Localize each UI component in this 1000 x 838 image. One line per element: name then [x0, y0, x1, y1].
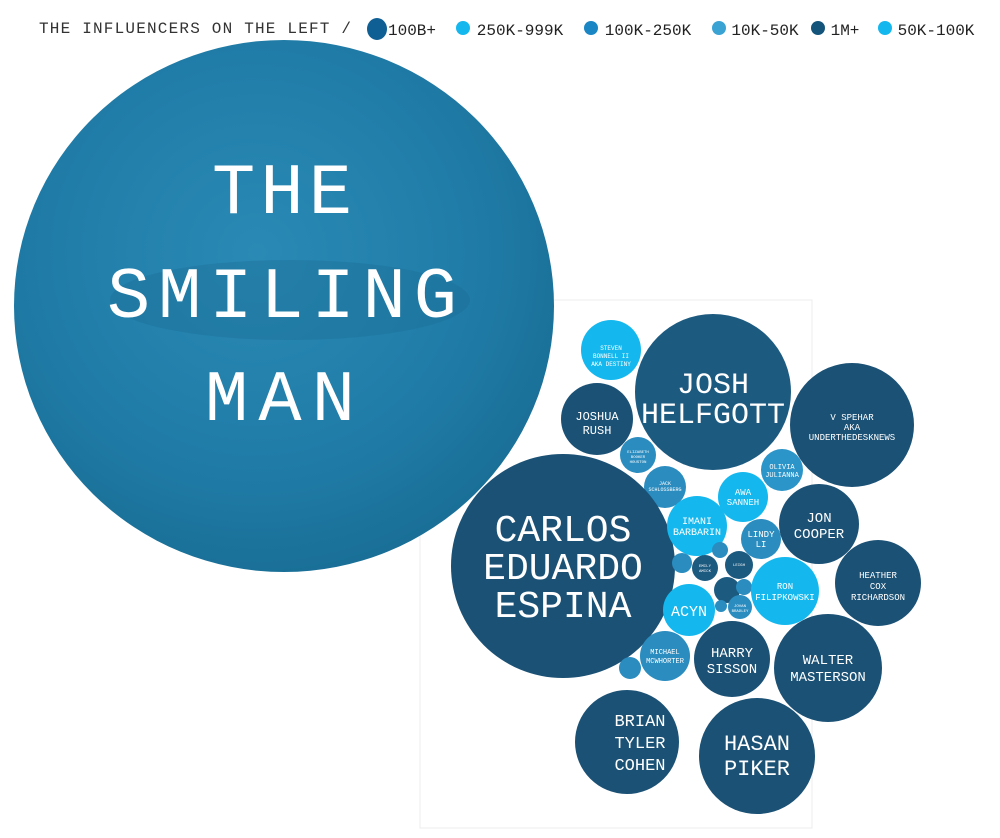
bubble: Elizabeth: ELIZABETH: [627, 451, 649, 455]
bubble: Ron Filipkowski: RON: [777, 582, 793, 592]
big circle: the smiling man: [14, 40, 554, 572]
bubble: Walter Masterson: [774, 614, 882, 722]
bubble: Olivia Julianna: OLIVIA: [769, 464, 795, 472]
bubble: Acyn: ACYN: [671, 604, 707, 621]
bubble: V Spehar: V SPEHAR: [830, 413, 874, 423]
bubble: Jon Cooper: [779, 484, 859, 564]
legend: 250K-999K: [477, 22, 564, 40]
bubble chart: [451, 314, 921, 814]
bubble: Joshua Rush: RUSH: [583, 424, 611, 438]
bubble: Brian Tyler Cohen: BRIAN: [614, 713, 666, 732]
bubble: Joshua Rush: JOSHUA: [575, 410, 619, 424]
bubble: Brian Tyler Cohen: COHEN: [614, 757, 666, 776]
small bubbles: BRADLEY: [732, 610, 749, 614]
bubble: Heather Cox Richardson: RICHARDSON: [851, 593, 905, 603]
bubble: Heather Cox Richardson: [835, 540, 921, 626]
legend: 100B+: [388, 22, 436, 40]
bubble: Ron Filipkowski: [751, 557, 819, 625]
bubble: Hasan Piker: HASAN: [724, 732, 790, 757]
legend: 50K-100K: [898, 22, 975, 40]
small bubbles: [619, 542, 753, 679]
bubble: Awa Sanneh: AWA: [735, 488, 752, 498]
big circle: the smiling man: SMILING: [107, 257, 457, 339]
small bubbles: AMICK: [699, 570, 712, 574]
bubble: Acyn: [663, 584, 715, 636]
legend: 100K-250K: [605, 22, 692, 40]
bubble: V Spehar: AKA: [844, 423, 861, 433]
bubble: Olivia Julianna: JULIANNA: [765, 472, 800, 480]
small bubbles: EMILY: [699, 565, 712, 569]
bubble: Elizabeth: BOOKER: [631, 456, 646, 460]
bubble: Harry Sisson: HARRY: [711, 646, 754, 662]
bubble: V Spehar: UNDERTHEDESKNEWS: [809, 433, 895, 443]
bubble: Elizabeth: [620, 437, 656, 473]
bubble: Imani Barbarin: BARBARIN: [673, 528, 721, 539]
legend: THE INFLUENCERS ON THE LEFT /: [39, 20, 351, 38]
bubble: Heather Cox Richardson: COX: [870, 582, 887, 592]
bubble: Jack Schlossberg: SCHLOSSBERG: [648, 487, 682, 493]
bubble: Awa Sanneh: [718, 472, 768, 522]
bubble: Josh Helfgott: HELFGOTT: [641, 399, 785, 433]
bubble: Michael McWhorter: MICHAEL: [650, 649, 680, 657]
bubble: Harry Sisson: [694, 621, 770, 697]
bubble: Elizabeth: HOUSTON: [630, 461, 647, 465]
bubble: Hasan Piker: [699, 698, 815, 814]
bubble: Heather Cox Richardson: HEATHER: [859, 571, 897, 581]
bubble: Michael McWhorter: MCWHORTER: [646, 658, 685, 666]
bubble: Lindy Li: [741, 519, 781, 559]
bubble: Carlos Eduardo Espina: EDUARDO: [483, 548, 643, 591]
bubble: Lindy Li: LINDY: [747, 530, 775, 540]
legend: [39, 18, 975, 40]
bubble: Jack Schlossberg: JACK: [659, 481, 671, 487]
bubble: Brian Tyler Cohen: [575, 690, 679, 794]
bubble: Joshua Rush: [561, 383, 633, 455]
bubble: Carlos Eduardo Espina: CARLOS: [495, 510, 631, 553]
bubble: Hasan Piker: PIKER: [724, 757, 790, 782]
small bubbles: JOVAN: [734, 605, 747, 609]
bubble: Steven Bonnell: [581, 320, 641, 380]
bubble: Imani Barbarin: IMANI: [682, 517, 712, 528]
bubble: Brian Tyler Cohen: TYLER: [614, 735, 666, 754]
legend: 10K-50K: [731, 22, 799, 40]
bubble: Harry Sisson: SISSON: [707, 662, 757, 678]
bubble: Michael McWhorter: [640, 631, 690, 681]
bubble: Steven Bonnell: AKA DESTINY: [591, 361, 631, 368]
bubble: Walter Masterson: WALTER: [803, 653, 854, 669]
bubble: Olivia Julianna: [761, 449, 803, 491]
bubble: Walter Masterson: MASTERSON: [790, 670, 866, 686]
big circle: the smiling man: THE: [212, 153, 352, 235]
bubble: Steven Bonnell: BONNELL II: [593, 353, 629, 360]
bubble: Carlos Eduardo Espina: ESPINA: [495, 586, 632, 629]
bubble: Steven Bonnell: STEVEN: [600, 345, 622, 352]
bubble: Jon Cooper: COOPER: [794, 527, 845, 543]
bubble: Carlos Eduardo Espina: [451, 454, 675, 678]
bubble: Ron Filipkowski: FILIPKOWSKI: [755, 593, 815, 603]
bubble: Jack Schlossberg: [644, 466, 686, 508]
big circle: the smiling man: MAN: [205, 360, 355, 442]
bubble: Josh Helfgott: JOSH: [677, 369, 749, 403]
bubble: Lindy Li: LI: [756, 540, 766, 550]
small bubbles: LEIGH: [733, 564, 746, 568]
bubble: Josh Helfgott: [635, 314, 791, 470]
bubble: V Spehar: [790, 363, 914, 487]
bubble: Jon Cooper: JON: [806, 511, 832, 527]
panel: bubble chart background: [420, 300, 812, 828]
bubble: Awa Sanneh: SANNEH: [727, 498, 759, 508]
bubble: Imani Barbarin: [667, 496, 727, 556]
legend: 1M+: [831, 22, 859, 40]
